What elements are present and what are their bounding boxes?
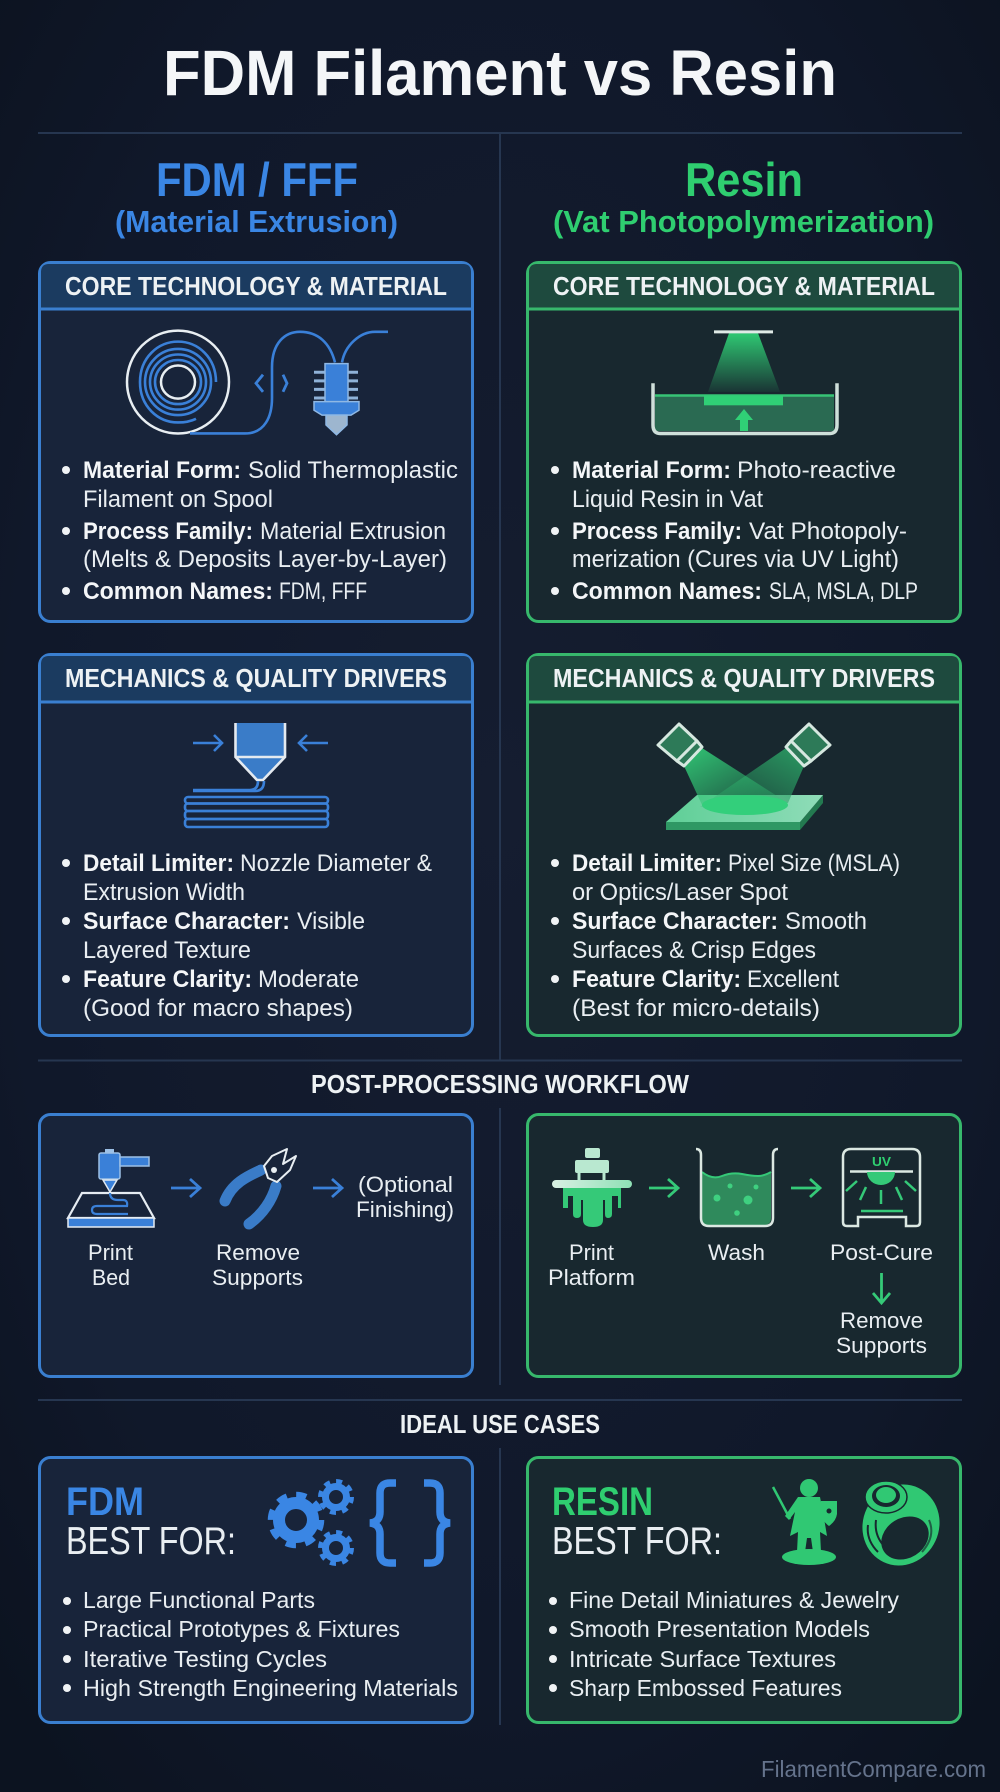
column heading: FDM: FDM / FFF: [156, 153, 358, 206]
list: FDM uses: High Strength Engineering Materials: [83, 1675, 458, 1701]
bullet: Process Family: Process Family:: [83, 518, 253, 545]
list: FDM uses: Iterative Testing Cycles: [83, 1646, 327, 1672]
label: remove supports: [836, 1308, 927, 1358]
heading: CORE TECHNOLOGY & MATERIAL: [65, 273, 447, 301]
bullet: Surface Character: [551, 908, 867, 964]
bullet: Feature Clarity: Excellent: [747, 966, 839, 993]
bullet: Detail Limiter: Detail Limiter:: [83, 850, 234, 877]
bullet: Material Form: Solid Thermoplastic: [248, 457, 458, 484]
list: resin uses: Intricate Surface Textures: [569, 1646, 836, 1672]
label: print platform: Platform: [548, 1265, 635, 1290]
bullet: Detail Limiter: [62, 850, 432, 906]
panel: FDM core technology: [40, 262, 472, 622]
label: print bed: Bed: [92, 1265, 130, 1290]
heading: [552, 1480, 722, 1563]
section heading: ideal use cases: IDEAL USE CASES: [400, 1411, 600, 1439]
bullet: Surface Character: Visible: [297, 908, 365, 935]
bullet: Surface Character: Surface Character:: [83, 908, 290, 935]
column heading: FDM: (Material Extrusion): [115, 204, 398, 239]
column heading: Resin: Resin: [685, 153, 803, 206]
bullet: Feature Clarity: Moderate: [258, 966, 359, 993]
arrow: [649, 1179, 678, 1197]
bullet: Process Family: Vat Photopoly-: [749, 518, 907, 545]
watermark: FilamentCompare.com: [761, 1756, 986, 1782]
list: resin uses: Fine Detail Miniatures & Jewelry: [569, 1587, 899, 1613]
bullet: Detail Limiter: Pixel Size (MSLA): [728, 850, 900, 877]
heading: FDM: [66, 1480, 144, 1524]
panel: FDM mechanics: [40, 654, 472, 1036]
label: optional finishing: (Optional: [358, 1172, 453, 1197]
heading: CORE TECHNOLOGY & MATERIAL: [553, 273, 935, 301]
bullet: Detail Limiter: or Optics/Laser Spot: [572, 879, 788, 906]
bullet: Material Form: [62, 457, 458, 513]
bullet: Material Form: Liquid Resin in Vat: [572, 486, 763, 513]
arrow: [313, 1179, 342, 1197]
icon: miniature figure: [773, 1479, 837, 1565]
icon: print bed: [68, 1149, 154, 1227]
icon: wash beaker: [696, 1149, 778, 1226]
bullet: Process Family: merization (Cures via UV Light): [572, 546, 899, 573]
heading: MECHANICS & QUALITY DRIVERS: [553, 665, 935, 693]
bullet: Common Names: Common Names:: [572, 578, 762, 605]
label: optional finishing: Finishing): [356, 1197, 454, 1222]
icon: ring: [849, 1472, 953, 1578]
label: wash: Wash: [708, 1240, 765, 1265]
bullet: Material Form: Material Form:: [572, 457, 731, 484]
column heading: Resin: [553, 153, 934, 239]
heading: [66, 1480, 236, 1563]
label: remove supports: Supports: [212, 1265, 303, 1290]
arrow: down: [873, 1273, 890, 1303]
icon: nozzle and layers: [185, 723, 328, 827]
list: FDM uses: [63, 1587, 458, 1701]
list: FDM uses: Practical Prototypes & Fixtures: [83, 1616, 400, 1642]
heading: BEST FOR:: [66, 1520, 236, 1563]
bullet: Surface Character: Smooth: [785, 908, 867, 935]
label: optional finishing: [356, 1172, 454, 1222]
bullet: Surface Character: [62, 908, 365, 964]
label: print bed: Print: [88, 1240, 133, 1265]
label: remove supports: [212, 1240, 303, 1290]
label: remove supports: Supports: [836, 1333, 927, 1358]
bullet: Feature Clarity: [551, 966, 839, 1022]
panel: Resin best for: [528, 1458, 960, 1722]
title: FDM Filament vs Resin: [163, 37, 837, 109]
panel: FDM workflow: [40, 1114, 472, 1376]
icon: resin vat with light: [653, 332, 837, 433]
bullet: Feature Clarity: Feature Clarity:: [83, 966, 252, 993]
bullet: Process Family: (Melts & Deposits Layer-by-Layer): [83, 546, 447, 573]
bullet: Common Names: [62, 578, 367, 605]
bullet: Common Names: [551, 578, 918, 605]
section heading: post-processing: POST-PROCESSING WORKFLOW: [311, 1071, 690, 1099]
label: remove supports: Remove: [840, 1308, 923, 1333]
icon: filament spool and hotend: [127, 331, 388, 435]
bullet: Material Form: Material Form:: [83, 457, 241, 484]
bullet: Detail Limiter: [551, 850, 900, 906]
bullet: Detail Limiter: Nozzle Diameter &: [240, 850, 432, 877]
icon: gears and braces: [272, 1482, 450, 1564]
heading: MECHANICS & QUALITY DRIVERS: [65, 665, 447, 693]
icon: print platform: [552, 1148, 632, 1227]
bullet: Feature Clarity: (Best for micro-details): [572, 995, 820, 1022]
heading: RESIN: [552, 1480, 653, 1524]
bullet: Feature Clarity: [62, 966, 359, 1022]
bullet: Detail Limiter: Extrusion Width: [83, 879, 245, 906]
bullet: Common Names: FDM, FFF: [279, 578, 367, 605]
bullet: Process Family: [551, 518, 907, 573]
bullet: Common Names: SLA, MSLA, DLP: [769, 578, 918, 605]
label: print platform: [548, 1240, 635, 1290]
column heading: FDM: [115, 153, 398, 239]
list: FDM uses: Large Functional Parts: [83, 1587, 315, 1613]
bullet: Surface Character: Layered Texture: [83, 937, 251, 964]
panel: Resin core technology: [528, 262, 960, 622]
label: remove supports: Remove: [216, 1240, 300, 1265]
bullet: Detail Limiter: Detail Limiter:: [572, 850, 722, 877]
bullet: Process Family: Material Extrusion: [260, 518, 446, 545]
panel: Resin workflow: [528, 1114, 960, 1376]
bullet: Process Family: [62, 518, 447, 573]
label: post-cure: Post-Cure: [830, 1240, 933, 1265]
bullet: Feature Clarity: Feature Clarity:: [572, 966, 741, 993]
bullet: Common Names: Common Names:: [83, 578, 273, 605]
arrow: [791, 1179, 820, 1197]
panel: FDM best for: [40, 1458, 472, 1722]
label: print bed: [88, 1240, 133, 1290]
arrow: [171, 1179, 200, 1197]
list: resin uses: Sharp Embossed Features: [569, 1675, 842, 1701]
icon: pliers: [225, 1149, 296, 1224]
panel: Resin mechanics: [528, 654, 960, 1036]
bullet: Material Form: [551, 457, 896, 513]
bullet: Surface Character: Surface Character:: [572, 908, 778, 935]
bullet: Material Form: Filament on Spool: [83, 486, 273, 513]
list: resin uses: [549, 1587, 899, 1701]
heading: BEST FOR:: [552, 1520, 722, 1563]
icon: projectors and build plate: [658, 724, 830, 830]
icon: UV cure box: [843, 1149, 920, 1226]
bullet: Feature Clarity: (Good for macro shapes): [83, 995, 353, 1022]
list: resin uses: Smooth Presentation Models: [569, 1616, 870, 1642]
bullet: Process Family: Process Family:: [572, 518, 742, 545]
icon: UV cure box: UV: [872, 1154, 891, 1169]
bullet: Surface Character: Surfaces & Crisp Edges: [572, 937, 816, 964]
column heading: Resin: (Vat Photopolymerization): [553, 204, 934, 239]
label: print platform: Print: [569, 1240, 614, 1265]
bullet: Material Form: Photo-reactive: [737, 457, 896, 484]
